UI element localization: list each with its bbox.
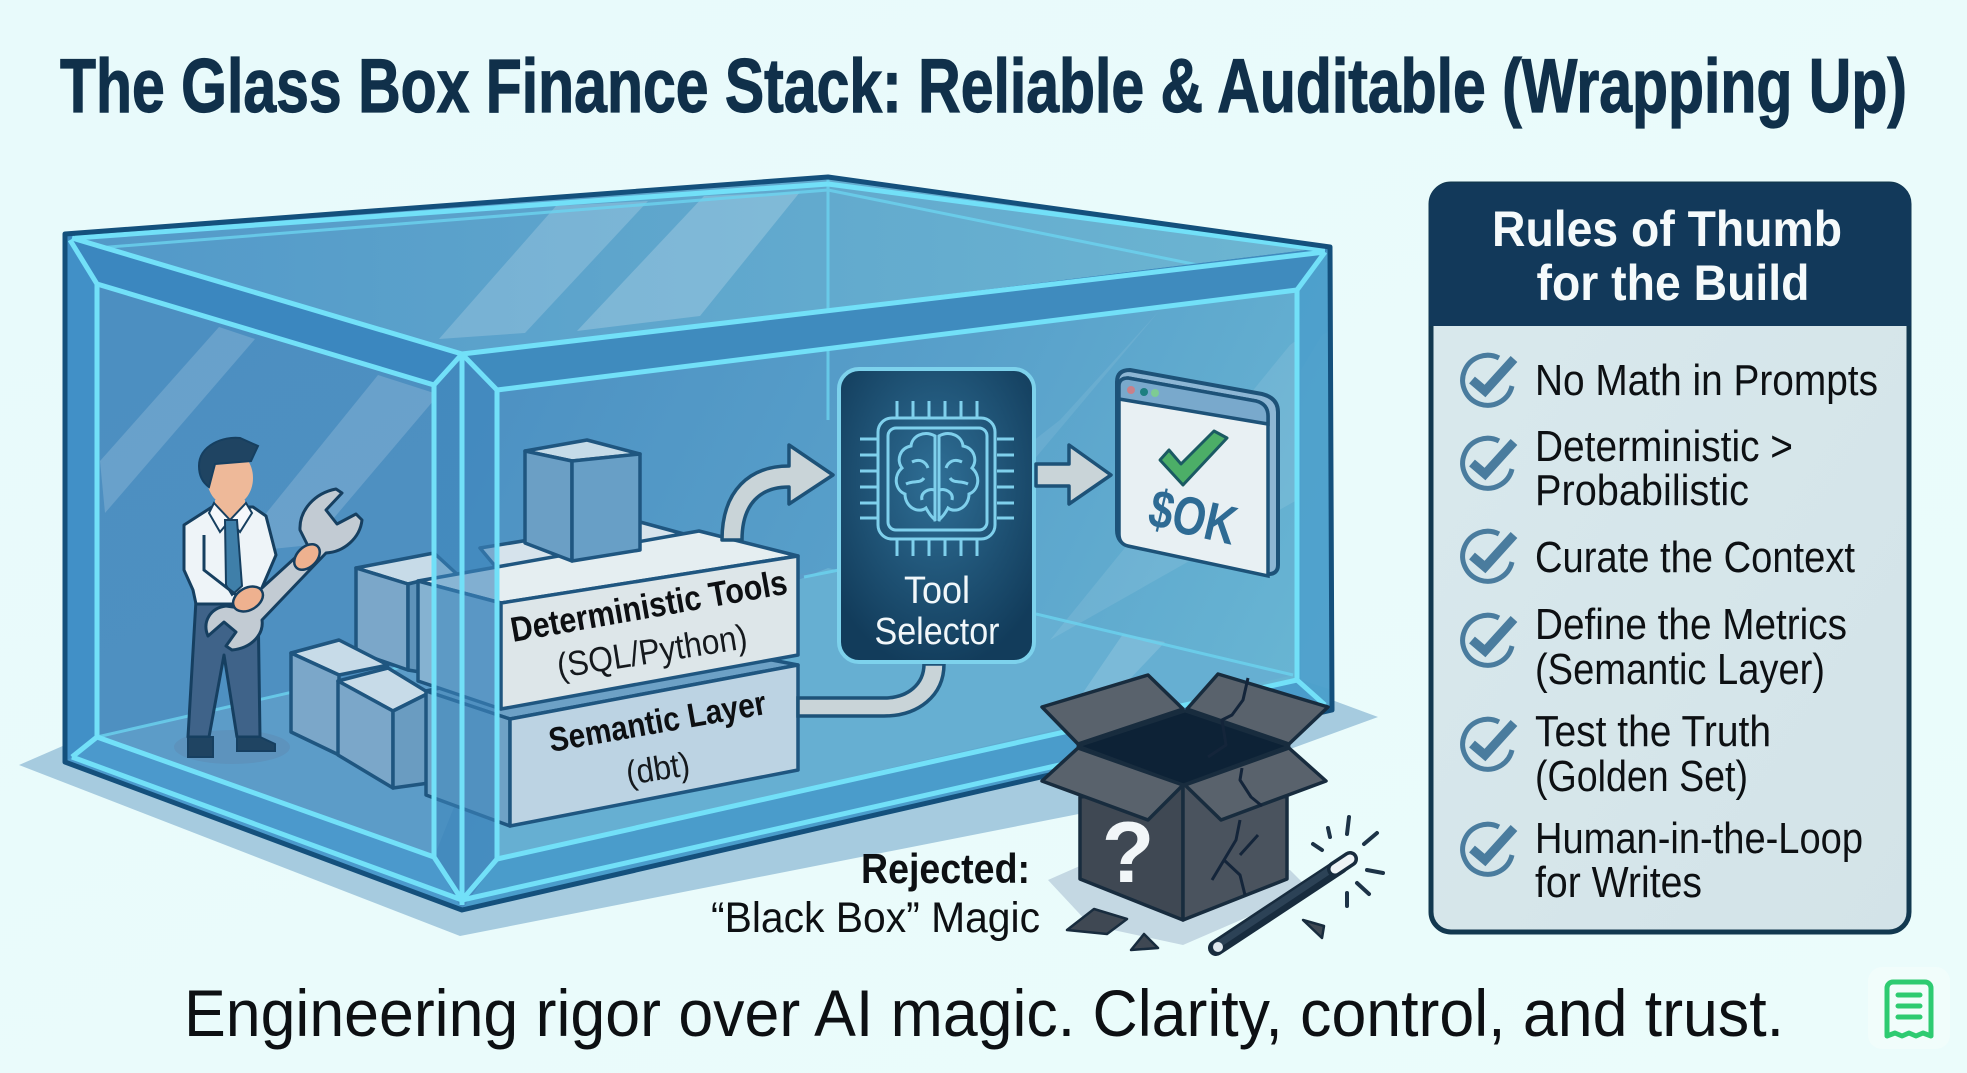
right face — [1183, 785, 1287, 920]
glass glare stripes — [100, 192, 1332, 700]
result window — [1117, 370, 1278, 576]
brain icon — [896, 434, 978, 520]
left wall floor — [97, 568, 828, 857]
glass box right wall — [462, 247, 1332, 910]
right wall floor — [497, 568, 1293, 859]
icon: green notes badge — [1868, 967, 1950, 1049]
person with wrench — [174, 438, 362, 764]
hair — [199, 438, 258, 487]
glass outer outline — [65, 177, 1332, 910]
rule 1: No Math in Prompts — [1535, 356, 1878, 405]
top cube — [525, 440, 640, 561]
front right flap — [1185, 748, 1326, 820]
semantic layer slab — [426, 650, 798, 826]
rule 4 — [1535, 600, 1847, 694]
rule 2 — [1535, 422, 1793, 515]
question mark: ? — [1102, 805, 1154, 901]
arm line — [204, 535, 240, 598]
rule 4: (Semantic Layer) — [1535, 645, 1825, 694]
green check — [1160, 431, 1227, 485]
ground shadow — [19, 700, 1378, 936]
$OK label: $OK — [1143, 478, 1243, 556]
icon: check 2 — [1463, 438, 1514, 488]
face — [207, 450, 253, 506]
neck and collar — [215, 500, 245, 522]
small plate behind top cube — [480, 522, 684, 572]
rule 5 — [1535, 707, 1771, 801]
icon: check 6 — [1463, 824, 1514, 874]
rule 2: Deterministic > — [1535, 422, 1793, 471]
rule 2: Probabilistic — [1535, 466, 1749, 515]
icon: check 1 — [1463, 355, 1514, 405]
deterministic tools label: Deterministic Tools — [508, 563, 790, 650]
tool selector label: Tool — [904, 570, 970, 612]
rule 6 — [1535, 814, 1863, 907]
wand sparks — [1313, 817, 1383, 906]
curved arrow to tool selector — [722, 445, 833, 540]
box opening — [1078, 711, 1289, 785]
rule 6: Human-in-the-Loop — [1535, 814, 1863, 863]
footer tagline: Engineering rigor over AI magic. Clarity, control, and trust. — [184, 976, 1784, 1050]
tool selector card: Selector — [874, 611, 1000, 653]
rejected caption — [711, 845, 1040, 942]
rejected caption: “Black Box” Magic — [711, 894, 1040, 942]
icon: check 5 — [1463, 719, 1514, 769]
shoes — [188, 737, 275, 757]
connector from semantic layer to tool selector — [798, 664, 944, 716]
icon: check 4 — [1463, 615, 1514, 665]
glass bright edges — [70, 184, 1325, 905]
rule 6: for Writes — [1535, 858, 1702, 907]
sql python label: (SQL/Python) — [554, 617, 750, 686]
deterministic tools slab — [418, 531, 798, 709]
semantic layer label: Semantic Layer — [546, 684, 769, 760]
arrow to result window — [1036, 445, 1111, 504]
magic wand — [1213, 859, 1350, 952]
tie — [225, 520, 242, 595]
glass box left wall — [65, 234, 462, 910]
tool selector card — [839, 369, 1034, 662]
panel: rules of thumb — [1429, 183, 1911, 932]
floor shadow — [174, 730, 290, 764]
hands — [229, 581, 267, 617]
back left flap — [1042, 675, 1183, 744]
rejected caption: Rejected: — [861, 845, 1030, 892]
cracks — [1208, 678, 1262, 895]
back right flap — [1187, 674, 1328, 744]
chip icon — [860, 401, 1014, 556]
rule 3: Curate the Context — [1535, 533, 1855, 582]
glass front bevels — [65, 234, 1332, 910]
rule 5: (Golden Set) — [1535, 752, 1748, 801]
panel heading: Rules of Thumb — [1492, 201, 1842, 257]
left face — [1080, 785, 1183, 920]
panel: rules of thumb: for the Build — [1536, 255, 1810, 311]
icon: check 3 — [1463, 531, 1514, 581]
shirt — [184, 507, 276, 604]
black box — [1042, 674, 1383, 952]
box floor shadow — [1048, 865, 1310, 945]
back edges of glass box — [97, 177, 1297, 737]
trousers — [188, 600, 260, 737]
broken shards — [1067, 909, 1127, 934]
glass box — [19, 177, 1378, 936]
wrench — [206, 489, 362, 650]
glass box top face — [65, 177, 1330, 354]
rule 5: Test the Truth — [1535, 707, 1771, 756]
panel header — [1429, 183, 1911, 326]
front left flap — [1042, 748, 1183, 820]
dbt label: (dbt) — [623, 745, 692, 793]
background stacked cubes — [291, 553, 459, 788]
rule 4: Define the Metrics — [1535, 600, 1847, 649]
